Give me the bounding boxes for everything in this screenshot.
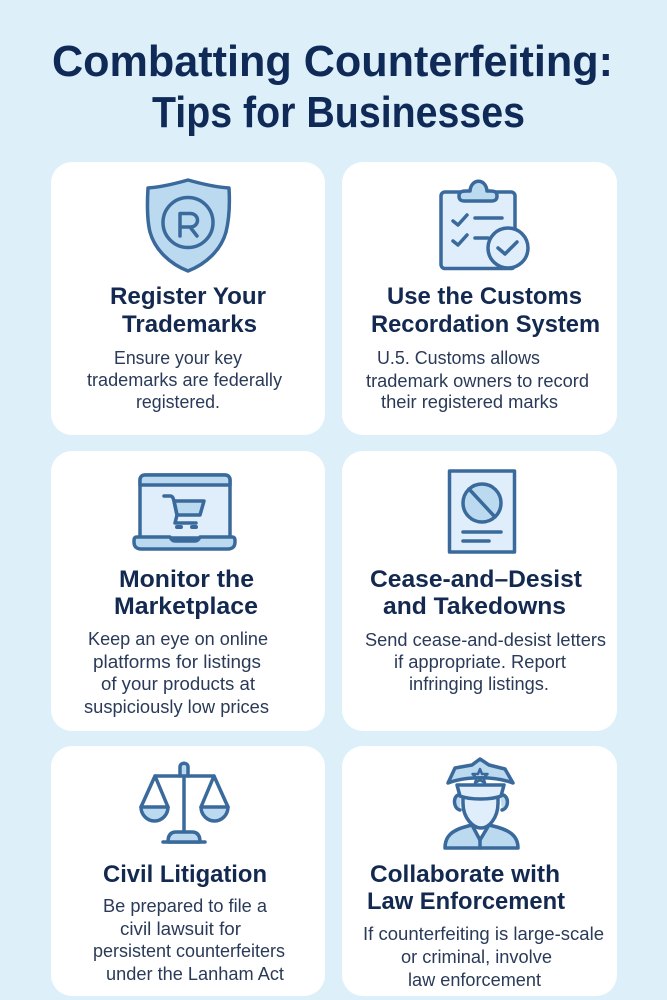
heading: and Takedowns: [383, 593, 566, 620]
body text: infringing listings.: [409, 673, 549, 694]
body text: if appropriate. Report: [394, 651, 566, 672]
body text: trademark owners to record: [366, 370, 589, 391]
heading: Monitor the: [119, 566, 254, 593]
body text: [84, 628, 269, 717]
body text: Ensure your key: [114, 347, 243, 368]
body text: platforms for listings: [93, 651, 261, 672]
body text: Be prepared to file a: [103, 895, 268, 916]
body text: If counterfeiting is large-scale: [363, 923, 604, 944]
body text: Keep an eye on online: [88, 628, 268, 649]
heading: [371, 283, 600, 338]
panel: cease-and-desist and takedowns: [342, 451, 617, 731]
panel: monitor the marketplace: [51, 451, 325, 731]
heading: Use the Customs: [387, 283, 582, 310]
heading: Trademarks: [122, 311, 257, 338]
body text: [365, 629, 606, 694]
body text: U.5. Customs allows: [377, 347, 540, 368]
heading: Civil Litigation: [103, 861, 267, 888]
body text: persistent counterfeiters: [93, 940, 285, 961]
heading: Register Your: [110, 283, 266, 310]
panel: customs recordation: [342, 162, 617, 435]
icon: clipboard with check badge: [441, 181, 528, 268]
body text: trademarks are federally: [87, 369, 283, 390]
body text: civil lawsuit for: [120, 918, 241, 939]
icon: laptop with shopping cart: [134, 475, 235, 549]
icon: scales of justice: [141, 763, 228, 842]
title: [52, 38, 613, 137]
icon: police officer: [445, 759, 518, 848]
heading: Cease-and–Desist: [370, 566, 582, 593]
body text: their registered marks: [381, 391, 558, 412]
heading: [114, 566, 258, 620]
body text: registered.: [136, 391, 220, 412]
heading: [370, 566, 582, 620]
title: Combatting Counterfeiting:: [52, 38, 613, 86]
panel: collaborate with law enforcement: [342, 746, 617, 996]
heading: [367, 861, 565, 915]
body text: under the Lanham Act: [106, 963, 284, 984]
body text: [93, 895, 285, 984]
heading: Law Enforcement: [367, 888, 565, 915]
heading: Marketplace: [114, 593, 258, 620]
body text: [366, 347, 589, 412]
heading: Recordation System: [371, 311, 600, 338]
panel: register your trademarks: [51, 162, 325, 435]
body text: law enforcement: [408, 969, 541, 990]
body text: of your products at: [101, 673, 255, 694]
body text: suspiciously low prices: [84, 696, 269, 717]
icon: document with prohibition sign: [450, 471, 514, 552]
body text: [87, 347, 283, 412]
panel: civil litigation: [51, 746, 325, 996]
heading: [110, 283, 266, 338]
body text: Send cease-and-desist letters: [365, 629, 606, 650]
title: Tips for Businesses: [152, 89, 525, 137]
body text: [363, 923, 604, 990]
icon: shield with registered mark: [147, 180, 229, 271]
heading: Collaborate with: [370, 861, 560, 888]
body text: or criminal, involve: [401, 946, 552, 967]
